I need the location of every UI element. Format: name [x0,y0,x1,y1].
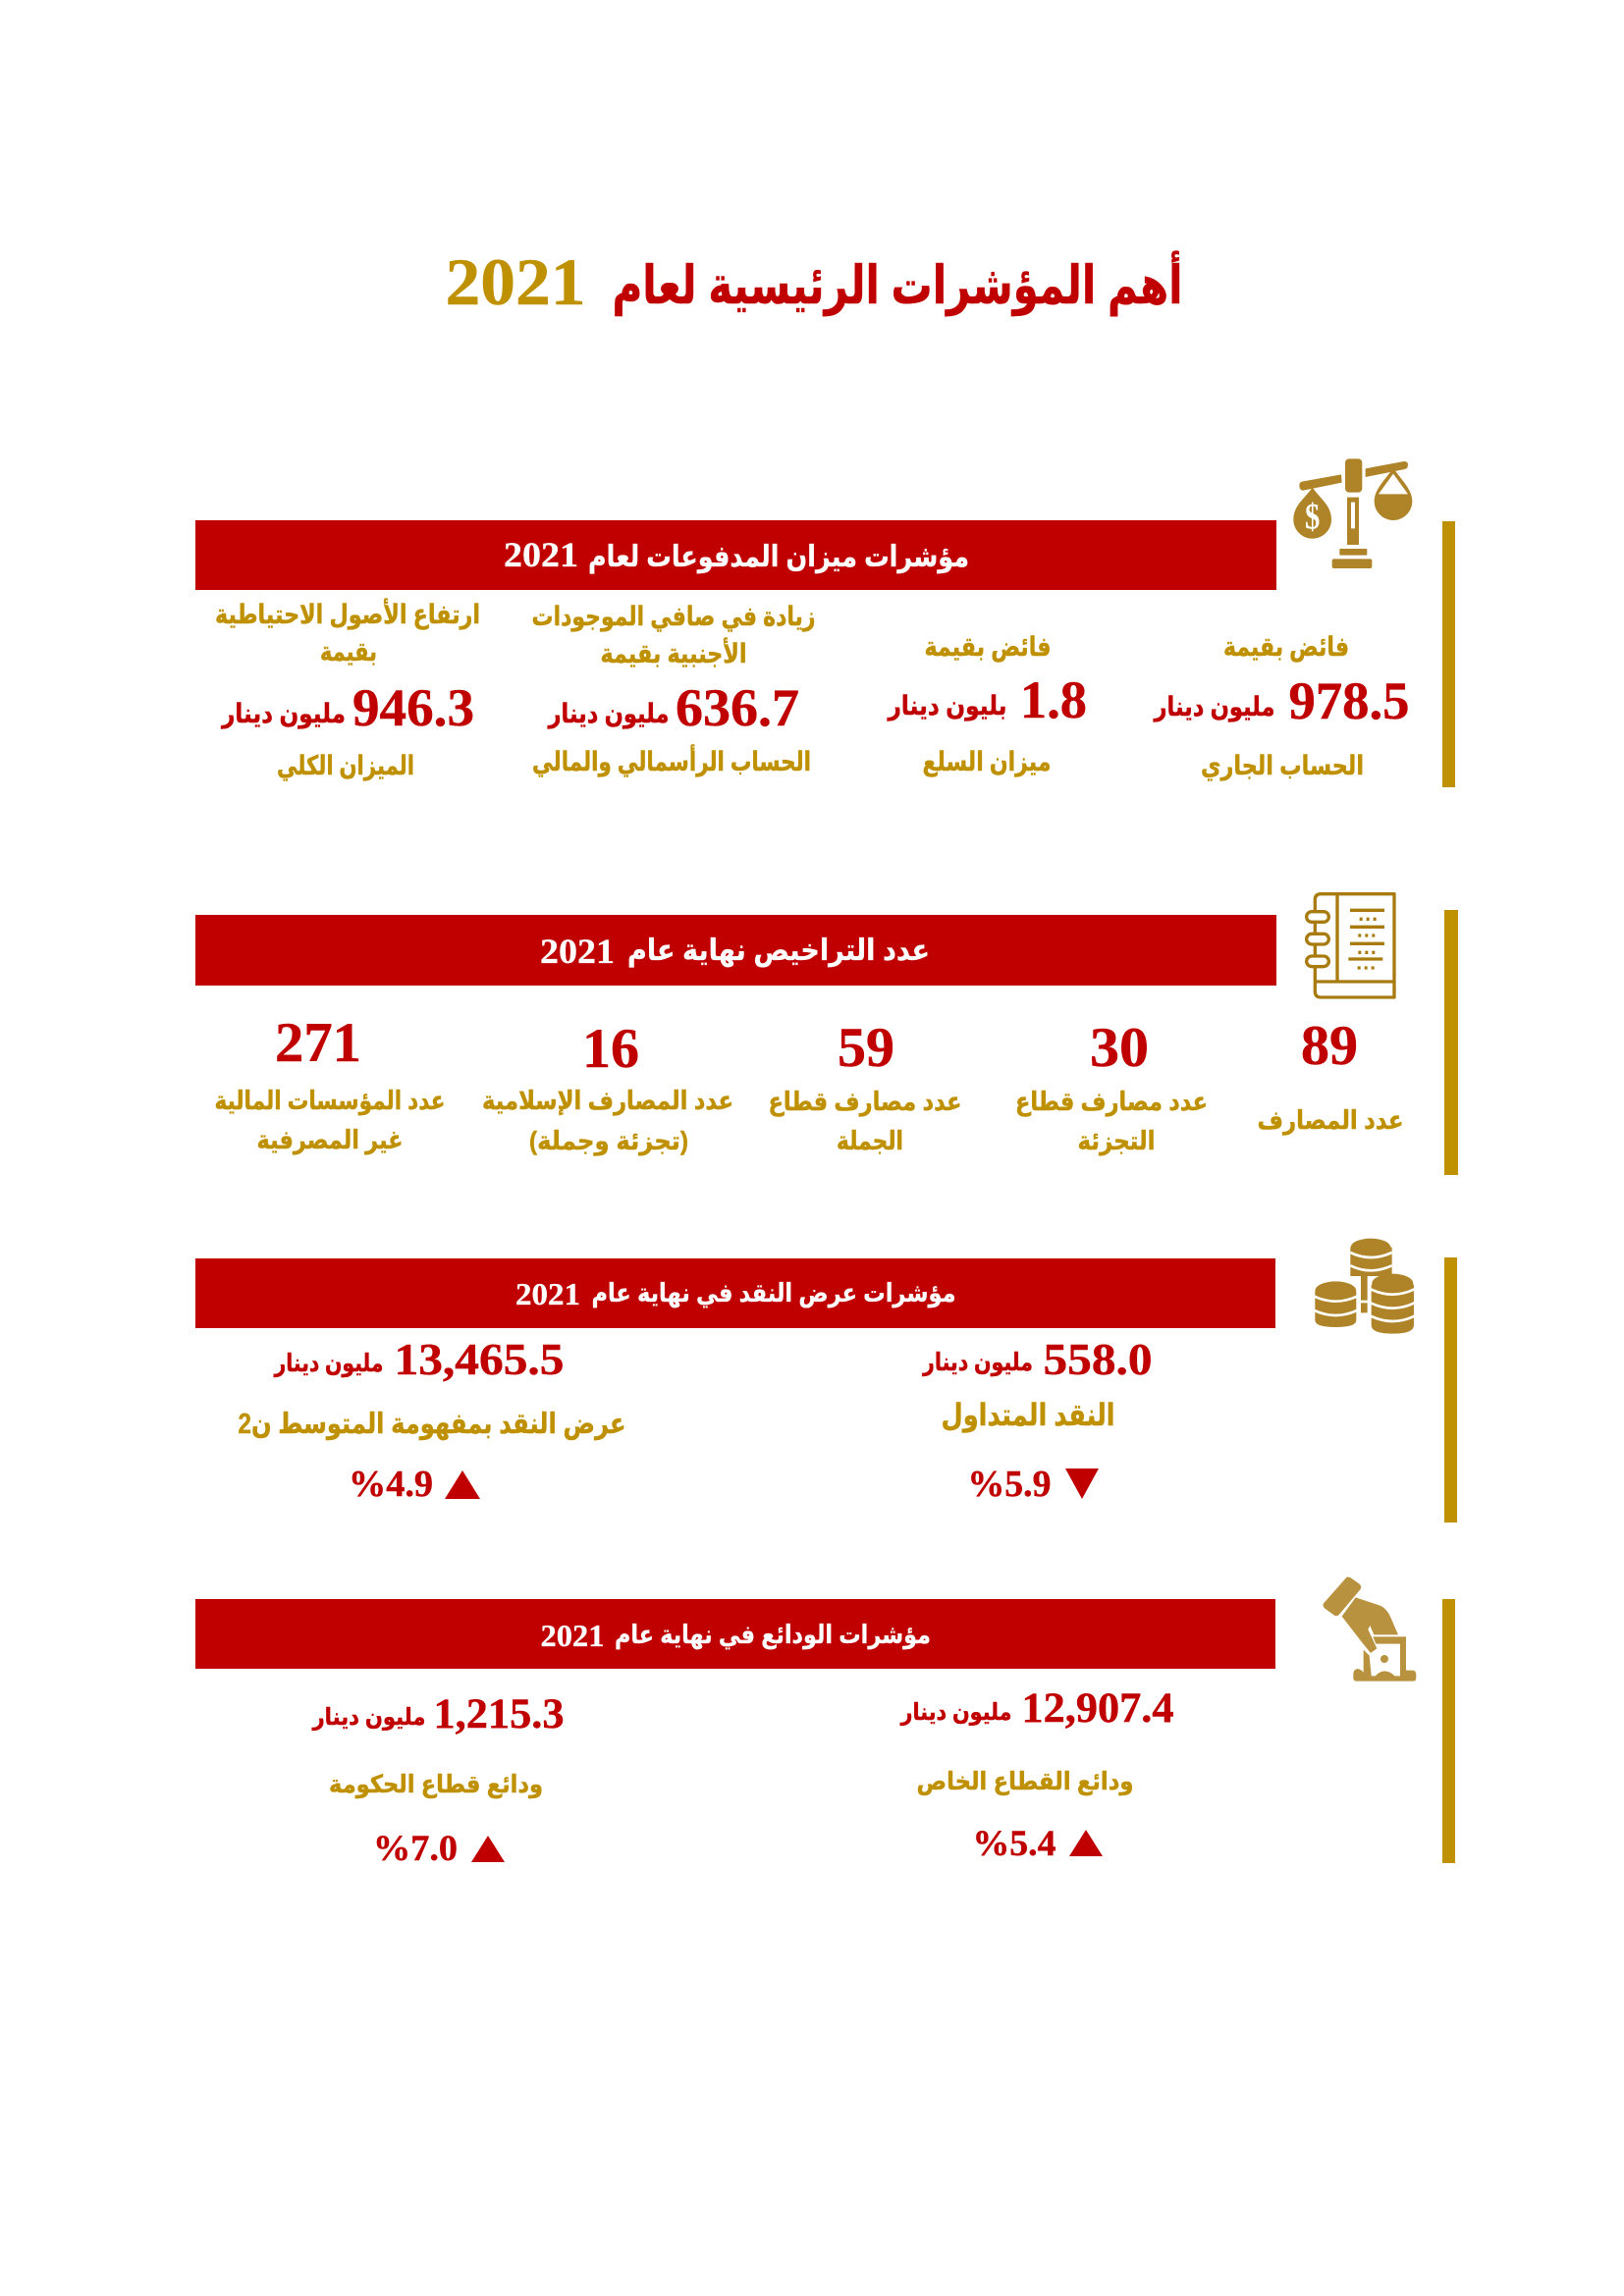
panel: deposits indicators [195,1576,1455,1869]
item: private sector deposits: مليون دينار [900,1699,1011,1726]
item: current account [1153,632,1410,781]
icon: up arrow [1069,1830,1103,1856]
section header bar: money supply [195,1258,1275,1328]
item: overall balance: الميزان الكلي [277,751,414,781]
stat: retail banks: عدد مصارف قطاع [1015,1087,1208,1116]
icon: up arrow [445,1470,480,1499]
item: capital and financial account: زيادة في صافي الموجودات [532,602,815,632]
item: trade balance: ميزان السلع [923,747,1051,777]
item: capital and financial account: الأجنبية بقيمة [601,637,746,668]
icon: notebook [1307,894,1394,997]
stat: banks [1257,1015,1404,1135]
section header bar: deposits [195,1599,1275,1669]
item: broad money M2: عرض النقد بمفهومة المتوسط ن2 [239,1409,626,1440]
item: broad money M2 [239,1334,626,1505]
stat: islamic banks [482,1018,733,1156]
icon: hand depositing into box [1323,1576,1416,1682]
item: overall balance [215,598,480,781]
item: trade balance: فائض بقيمة [925,632,1051,663]
section header bar: money supply: مؤشرات عرض النقد في نهاية عام [591,1278,956,1308]
item: private sector deposits: %5.4 [972,1824,1056,1864]
item: trade balance: 1.8 [1020,670,1087,729]
section header bar: balance of payments [195,520,1276,590]
stat: islamic banks: عدد المصارف الإسلامية [482,1086,733,1116]
stat: non-bank financial institutions [214,1012,446,1155]
item: overall balance: بقيمة [320,637,377,667]
item: capital and financial account: الحساب الرأسمالي والمالي [532,744,811,777]
panel: number of licences [195,894,1458,1175]
item: currency in circulation: 558.0 [1043,1334,1153,1384]
item: currency in circulation: النقد المتداول [941,1398,1115,1433]
item: current account: مليون دينار [1153,692,1274,722]
item: broad money M2: %4.9 [349,1464,433,1505]
stat: banks: 89 [1301,1015,1358,1077]
side accent bar [1444,1257,1457,1522]
item: government sector deposits: ودائع قطاع الحكومة [329,1771,543,1799]
item: government sector deposits: مليون دينار [312,1704,426,1731]
item: private sector deposits [900,1685,1174,1864]
item: trade balance: بليون دينار [887,691,1007,721]
icon: up arrow [471,1836,505,1862]
stat: retail banks: 30 [1090,1017,1149,1079]
title [446,244,1182,319]
item: capital and financial account [532,602,815,777]
item: currency in circulation: %5.9 [968,1464,1051,1505]
item: overall balance: مليون دينار [220,699,346,729]
item: currency in circulation [921,1334,1153,1505]
item: government sector deposits [312,1691,564,1869]
section header bar: deposits: 2021 [540,1618,605,1653]
panel: money supply indicators [195,1239,1457,1522]
icon: down arrow [1065,1468,1099,1499]
stat: islamic banks: (تجزئة وجملة) [529,1126,688,1156]
section header bar: money supply: 2021 [515,1276,580,1311]
section header bar: balance of payments: مؤشرات ميزان المدفوعات لعام [588,541,969,574]
stat: retail banks [1015,1017,1208,1156]
item: broad money M2: مليون دينار [273,1350,383,1378]
icon: coin stacks [1314,1239,1415,1335]
item: current account: الحساب الجاري [1201,751,1364,781]
item: trade balance [887,632,1087,777]
stat: banks: عدد المصارف [1257,1105,1404,1135]
item: overall balance: ارتفاع الأصول الاحتياطية [215,598,480,630]
section header bar: deposits: مؤشرات الودائع في نهاية عام [615,1620,931,1650]
icon: balance scale with money bag [1293,458,1412,568]
section header bar: balance of payments: 2021 [504,535,578,574]
stat: non-bank financial institutions: 271 [275,1012,361,1074]
side accent bar [1442,521,1455,787]
item: current account: 978.5 [1288,671,1410,730]
section header bar: licences: 2021 [540,932,615,971]
item: capital and financial account: مليون دينار [547,699,670,729]
panel: balance of payments indicators [195,458,1455,787]
stat: non-bank financial institutions: غير المصرفية [257,1125,403,1155]
stat: wholesale banks: 59 [838,1017,894,1079]
item: broad money M2: 13,465.5 [395,1334,564,1384]
item: overall balance: 946.3 [352,678,474,737]
item: private sector deposits: ودائع القطاع الخاص [917,1768,1133,1796]
item: private sector deposits: 12,907.4 [1021,1685,1174,1732]
item: currency in circulation: مليون دينار [921,1349,1033,1377]
section header bar: licences [195,915,1276,986]
item: current account: فائض بقيمة [1223,632,1349,663]
stat: wholesale banks: عدد مصارف قطاع [768,1087,962,1116]
item: capital and financial account: 636.7 [676,678,799,737]
side accent bar [1444,910,1458,1175]
side accent bar [1442,1599,1455,1863]
section header bar: licences: عدد التراخيص نهاية عام [627,934,930,968]
stat: islamic banks: 16 [582,1018,639,1080]
title: 2021 [446,244,585,319]
stat: wholesale banks: الجملة [837,1126,903,1155]
stat: retail banks: التجزئة [1078,1126,1155,1156]
icon: balance scale with money bag: $ [1305,497,1320,537]
item: government sector deposits: %7.0 [373,1829,458,1869]
item: government sector deposits: 1,215.3 [434,1691,564,1737]
title: أهم المؤشرات الرئيسية لعام [613,250,1182,316]
stat: non-bank financial institutions: عدد المؤسسات المالية [214,1086,446,1116]
stat: wholesale banks [768,1017,962,1155]
